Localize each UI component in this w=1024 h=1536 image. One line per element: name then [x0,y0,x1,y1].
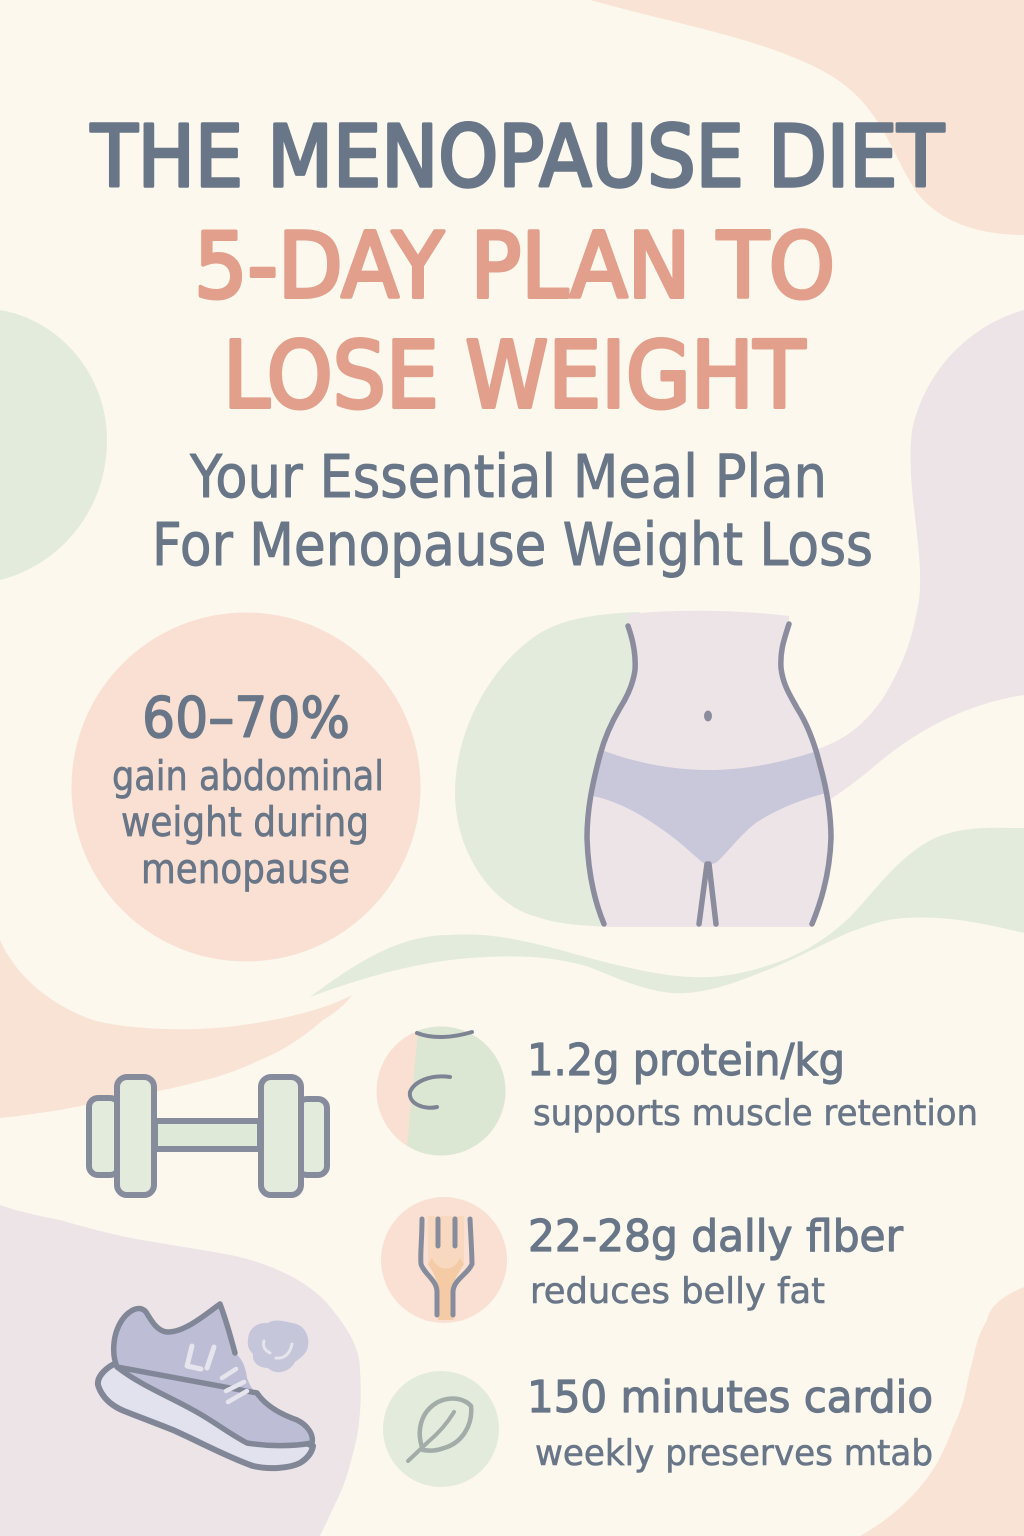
shoe sole [98,1364,313,1468]
shoe upper [114,1304,313,1446]
peach wave lower left [0,940,352,1118]
navel [704,710,712,722]
underwear [593,751,826,864]
shoe laces [187,1346,214,1369]
green blob left [0,310,107,580]
lilac ribbon right [800,310,1024,815]
peach blob top right [590,0,1024,235]
tagline: Your Essential Meal Plan [189,442,827,511]
body outline [587,624,831,924]
protein figure: 1.2g protein/kg [527,1035,845,1086]
headline line 2: LOSE WEIGHT [223,322,806,429]
shoe outline [114,1304,312,1446]
stat description [112,752,384,893]
fiber note: reduces belly fat [530,1271,825,1312]
headline line 1: 5-DAY PLAN TO [194,214,835,319]
stat row: fiber [381,1197,904,1323]
puff cloud [248,1321,308,1372]
cardio figure: 150 minutes cardio [527,1372,933,1423]
icon: running shoe [98,1304,313,1468]
fiber figure: 22-28g dally flber [528,1211,904,1262]
subtitle: plan headline [194,214,835,429]
stat description: gain abdominal [112,752,384,800]
stat number: 60–70% [142,686,350,751]
cardio note: weekly preserves mtab [535,1433,933,1474]
icon: protein circle [376,1026,506,1156]
stat circle: abdominal weight gain [72,612,420,962]
stat description: menopause [141,845,350,893]
title: THE MENOPAUSE DIET [90,108,945,207]
protein note: supports muscle retention [533,1093,978,1134]
tagline: For Menopause Weight Loss [152,510,873,579]
peach blob lower right [860,1287,1024,1536]
stat row: protein [376,1026,978,1156]
stat description: weight during [121,798,369,846]
green wave [310,828,1024,997]
icon: dumbbell [89,1077,327,1195]
icon: fork [381,1197,507,1323]
icon: leaf [383,1371,499,1487]
tagline [152,442,873,579]
lilac blob lower left [0,1205,361,1536]
stat row: cardio [383,1371,933,1487]
green blob behind torso [455,612,640,927]
illustration: torso [587,611,831,927]
